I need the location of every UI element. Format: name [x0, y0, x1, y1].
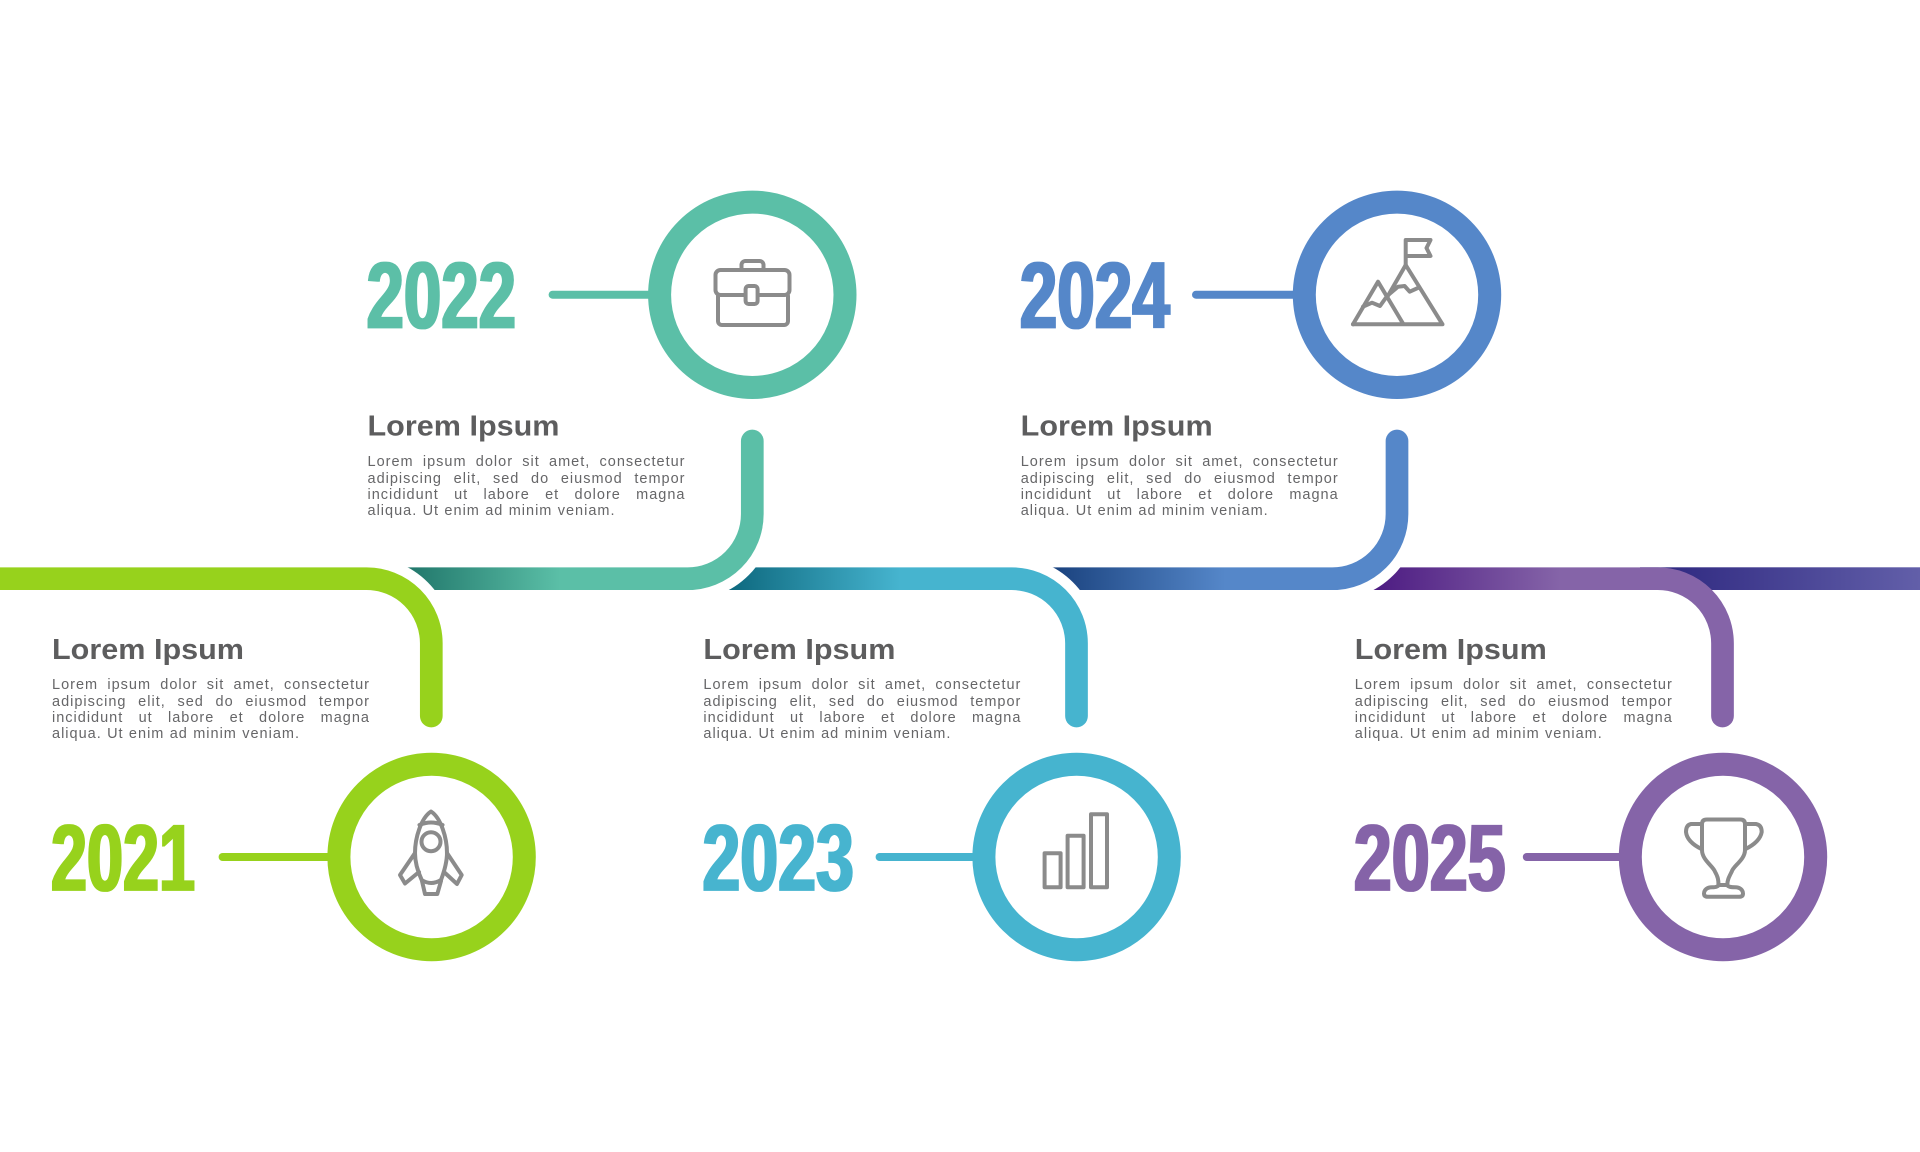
body text 2023: aliqua. Ut enim ad minim veniam.	[703, 726, 951, 742]
year 2021: 2021	[51, 806, 195, 912]
ribbon: 2023 cyan	[720, 579, 1076, 716]
icon: rocket	[400, 812, 462, 894]
icon: briefcase	[716, 261, 790, 325]
body text 2021	[52, 677, 370, 742]
body text 2022	[368, 454, 686, 519]
ribbon: 2022 teal	[395, 441, 752, 579]
connector 2021	[223, 853, 340, 861]
connector 2023	[880, 853, 985, 861]
body text 2023: adipiscing elit, sed do eiusmod tempor	[703, 694, 1021, 710]
year 2022: 2022	[366, 243, 516, 349]
milestone 2025	[1354, 634, 1816, 950]
body text 2023	[703, 677, 1021, 742]
body text 2024: aliqua. Ut enim ad minim veniam.	[1021, 503, 1269, 519]
connector 2024	[1196, 291, 1305, 299]
body text 2022: adipiscing elit, sed do eiusmod tempor	[368, 471, 686, 487]
body text 2021: incididunt ut labore et dolore magna	[52, 710, 370, 726]
body text 2025: Lorem ipsum dolor sit amet, consectetur	[1355, 677, 1673, 693]
ribbon: 2025 purple	[1365, 579, 1722, 716]
body text 2022: aliqua. Ut enim ad minim veniam.	[368, 503, 616, 519]
icon: mountain flag	[1353, 240, 1442, 324]
body text 2024: incididunt ut labore et dolore magna	[1021, 487, 1339, 503]
milestone 2024	[1020, 202, 1490, 443]
ring 2021	[339, 764, 524, 950]
ribbon: 2021 green	[0, 579, 431, 716]
heading 2024: Lorem Ipsum	[1021, 411, 1213, 443]
body text 2025: incididunt ut labore et dolore magna	[1355, 710, 1673, 726]
body text 2024	[1021, 454, 1339, 519]
body text 2023: Lorem ipsum dolor sit amet, consectetur	[703, 677, 1021, 693]
milestone 2023	[702, 634, 1169, 950]
body text 2025: aliqua. Ut enim ad minim veniam.	[1355, 726, 1603, 742]
ring 2024	[1304, 202, 1490, 388]
year 2025: 2025	[1354, 806, 1506, 912]
body text 2021: adipiscing elit, sed do eiusmod tempor	[52, 694, 370, 710]
body text 2024: Lorem ipsum dolor sit amet, consectetur	[1021, 454, 1339, 470]
icon: bar chart	[1045, 814, 1107, 887]
heading 2025: Lorem Ipsum	[1355, 634, 1547, 666]
icon: trophy	[1686, 820, 1762, 897]
connector 2022	[553, 291, 660, 299]
heading 2023: Lorem Ipsum	[703, 634, 895, 666]
body text 2024: adipiscing elit, sed do eiusmod tempor	[1021, 471, 1339, 487]
body text 2022: Lorem ipsum dolor sit amet, consectetur	[368, 454, 686, 470]
ring 2022	[660, 202, 845, 388]
body text 2023: incididunt ut labore et dolore magna	[703, 710, 1021, 726]
year 2024: 2024	[1020, 243, 1170, 349]
ring 2025	[1630, 764, 1816, 950]
ring 2023	[984, 764, 1169, 950]
body text 2022: incididunt ut labore et dolore magna	[368, 487, 686, 503]
milestone 2021	[51, 634, 524, 950]
body text 2021: Lorem ipsum dolor sit amet, consectetur	[52, 677, 370, 693]
ribbon: 2024 blue	[1040, 441, 1397, 579]
ribbon: end segment	[1640, 567, 1920, 590]
connector 2025	[1527, 853, 1630, 861]
heading 2021: Lorem Ipsum	[52, 634, 244, 666]
timeline ribbon	[0, 441, 1920, 716]
body text 2025: adipiscing elit, sed do eiusmod tempor	[1355, 694, 1673, 710]
year 2023: 2023	[702, 806, 854, 912]
milestone 2022	[366, 202, 845, 443]
heading 2022: Lorem Ipsum	[368, 411, 560, 443]
body text 2025	[1355, 677, 1673, 742]
body text 2021: aliqua. Ut enim ad minim veniam.	[52, 726, 300, 742]
